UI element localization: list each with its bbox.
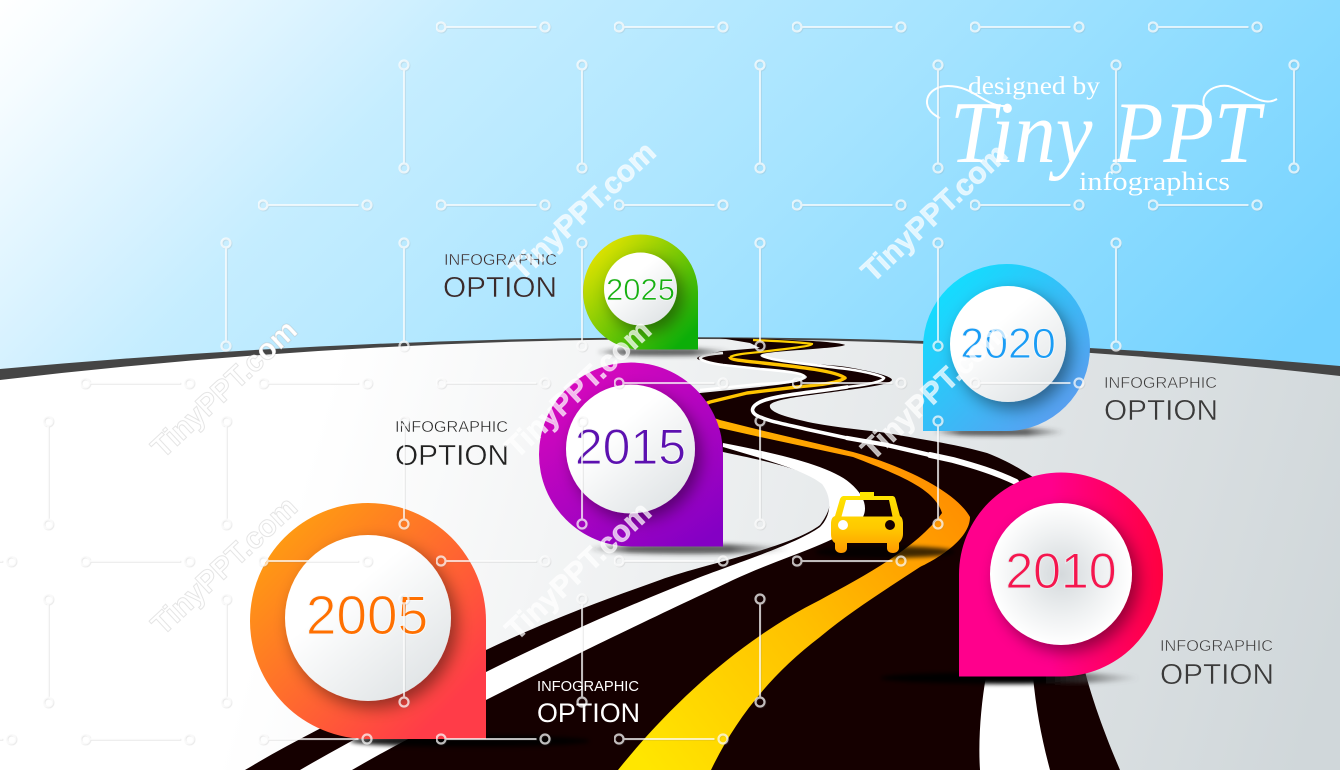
watermark text: TinyPPT.com [504, 136, 662, 287]
road surface [245, 338, 1120, 770]
label: 2020 option: INFOGRAPHIC [1104, 375, 1217, 392]
label: 2025 option [443, 252, 557, 304]
label: 2010 option [1160, 638, 1274, 691]
disc [950, 286, 1066, 402]
yellow centre line [618, 410, 970, 770]
pin body [539, 362, 723, 546]
year: 2015 [575, 419, 686, 475]
year: 2025 [606, 272, 675, 307]
watermark text: TinyPPT.com [855, 138, 1014, 289]
label: 2015 option: OPTION [395, 440, 509, 472]
year: 2020 [960, 320, 1056, 368]
watermark text [145, 136, 1014, 647]
label: 2015 option: INFOGRAPHIC [395, 419, 508, 436]
logo: designed by TinyPPT infographics: infographics [1079, 167, 1230, 196]
pin body [583, 234, 698, 350]
year: 2010 [1005, 543, 1117, 599]
pin body [923, 264, 1090, 431]
watermark text: TinyPPT.com [145, 491, 304, 642]
pin shadow [350, 735, 590, 747]
pin: 2010 [880, 473, 1163, 684]
winding road [245, 338, 1120, 770]
disc [285, 535, 451, 701]
pin shadow [590, 544, 790, 554]
pin: 2005 [250, 503, 590, 747]
label: 2020 option: OPTION [1104, 395, 1218, 427]
disc [604, 252, 677, 326]
label: 2005 option [537, 678, 640, 728]
pin: 2020 [923, 264, 1090, 436]
logo: designed by TinyPPT infographics: designed by [968, 73, 1101, 100]
label: 2025 option: INFOGRAPHIC [444, 252, 557, 269]
pin body [959, 473, 1163, 676]
label: 2005 option: INFOGRAPHIC [537, 678, 639, 695]
disc [566, 384, 695, 514]
pin body [250, 503, 486, 739]
left white edge line [300, 443, 865, 770]
pin: 2015 [539, 362, 790, 554]
pin shadow [597, 348, 733, 356]
label: 2005 option: OPTION [537, 698, 640, 728]
right white edge line [753, 387, 847, 438]
label: 2010 option: INFOGRAPHIC [1160, 638, 1273, 655]
pin shadow [880, 672, 1140, 684]
label: 2010 option: OPTION [1160, 659, 1274, 691]
disc [990, 503, 1132, 645]
label: 2015 option [395, 419, 509, 472]
year: 2005 [306, 584, 428, 646]
label: 2020 option [1104, 375, 1218, 427]
pin: 2025 [583, 234, 733, 356]
watermark text: TinyPPT.com [499, 314, 658, 465]
watermark text: TinyPPT.com [145, 314, 304, 465]
watermark text: TinyPPT.com [855, 316, 1014, 467]
pin shadow [934, 428, 1066, 436]
logo: designed by TinyPPT infographics: Tiny PPT [950, 85, 1266, 182]
car shadow on road [815, 546, 955, 558]
horizon ground [0, 337, 1340, 770]
watermark text: TinyPPT.com [499, 496, 658, 647]
label: 2025 option: OPTION [443, 272, 557, 304]
icon: taxi [831, 492, 903, 553]
sky background [0, 0, 1340, 400]
